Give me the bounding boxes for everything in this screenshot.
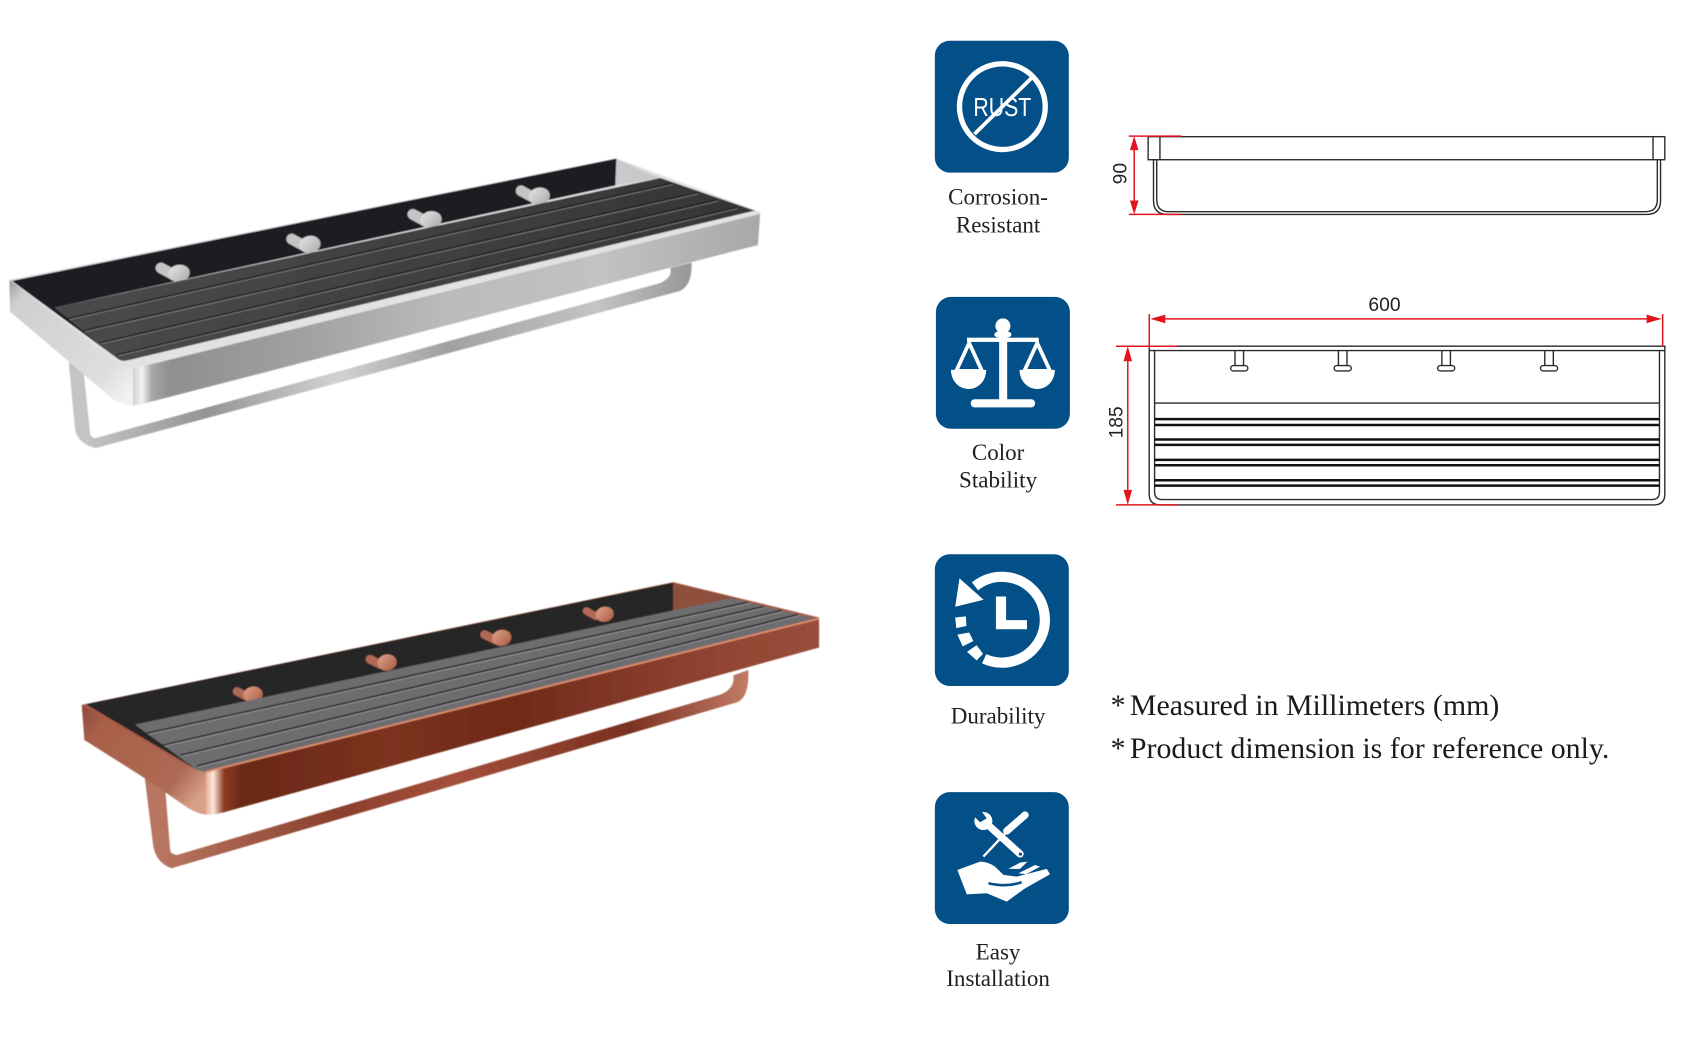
copper rim highlight — [206, 619, 819, 772]
feature: durability — [935, 554, 1069, 729]
silver hook 2 — [292, 234, 322, 255]
dimension label: 600: 600 — [1368, 295, 1401, 316]
note: reference only: Product dimension is for reference only. — [1130, 732, 1609, 765]
dimension label: 185: 185 — [1106, 406, 1127, 438]
note: units: * — [1111, 689, 1126, 722]
dimension label: 90: 90 — [1111, 163, 1132, 184]
silver hook 1 — [161, 263, 191, 284]
copper left side face — [82, 705, 206, 815]
feature: color stability — [936, 297, 1070, 493]
silver rim body — [9, 158, 760, 405]
hook 1 — [1231, 351, 1248, 371]
copper hook 2 — [370, 653, 398, 672]
panel: copper shelf photo — [82, 582, 819, 868]
icon: balance scale — [936, 297, 1070, 429]
silver back wall — [12, 159, 616, 358]
diagram: side elevation, 90 mm — [1111, 136, 1665, 214]
dimension: width arrow — [1149, 314, 1663, 346]
note: units: Measured in Millimeters (mm) — [1130, 689, 1499, 722]
dimension: height arrow — [1129, 136, 1181, 214]
feature: easy installation — [935, 792, 1069, 991]
hook 3 — [1438, 351, 1455, 371]
silver left side face — [9, 280, 136, 406]
copper hook 3 — [485, 628, 513, 647]
hook 4 — [1540, 351, 1558, 371]
top plan outline — [1149, 346, 1665, 505]
hook 2 — [1334, 351, 1351, 371]
silver front face — [133, 214, 760, 405]
copper towel bar — [145, 670, 748, 868]
notes — [1111, 689, 1609, 765]
feature: corrosion-resistant — [935, 41, 1069, 238]
copper front face — [206, 620, 819, 815]
panel: silver shelf photo — [9, 158, 760, 448]
silver right inner wall — [615, 159, 660, 185]
copper right inner wall — [673, 583, 740, 611]
silver towel bar — [69, 263, 692, 448]
icon: clock with back arrow — [935, 554, 1069, 686]
label: color stability: Color — [972, 439, 1025, 465]
diagram: top plan, 600 x 185 mm — [1106, 295, 1665, 505]
icon: rust prohibited: RUST — [973, 94, 1032, 122]
label: color stability: Stability — [959, 467, 1038, 493]
copper slatted tray — [135, 598, 815, 772]
label: durability: Durability — [951, 703, 1046, 729]
silver hook 4 — [521, 186, 551, 206]
copper back wall — [86, 583, 673, 769]
label: corrosion-resistant: Resistant — [956, 212, 1041, 238]
label: corrosion-resistant: Corrosion- — [948, 184, 1048, 210]
copper hook 1 — [237, 685, 264, 704]
label: easy installation: Installation — [946, 965, 1050, 991]
note: reference only: * — [1111, 732, 1126, 765]
label: easy installation: Easy — [976, 938, 1021, 964]
copper rim body — [82, 582, 819, 815]
icon: tools over hand — [935, 792, 1069, 924]
side elevation outline — [1148, 137, 1665, 214]
dimension: depth arrow — [1116, 346, 1177, 505]
silver hook 3 — [413, 209, 443, 230]
copper hook 4 — [586, 605, 615, 623]
silver slatted tray — [55, 178, 755, 361]
icon: rust prohibited — [935, 41, 1069, 173]
